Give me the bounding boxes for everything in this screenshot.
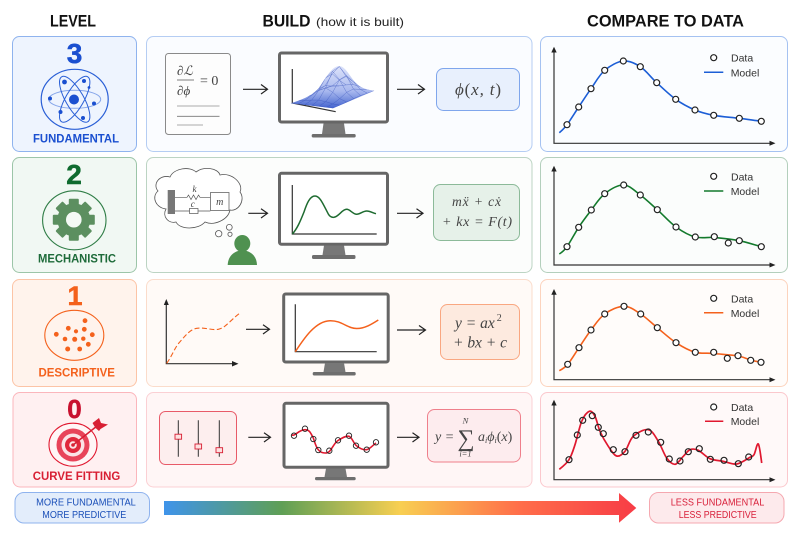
heading: build: (how it is built) (316, 15, 404, 29)
equation box: phi(x,t): ϕ(x, t) (455, 80, 501, 99)
equation box: mass spring damper (434, 184, 520, 240)
monitor with smooth curve (284, 294, 388, 376)
panel: data level 1 (540, 280, 788, 386)
legend: Model (731, 416, 759, 428)
callout: more fundamental, more predictive: MORE FUNDAMENTAL (36, 497, 136, 508)
arrow (397, 209, 423, 218)
number 1: 1 (67, 281, 83, 311)
equation box: basis sum: x) (501, 430, 512, 445)
arrow: gradient scale (164, 493, 636, 523)
icon: parameter sliders (160, 412, 236, 464)
legend: Model (731, 308, 759, 320)
icon: document with equation: = 0 (200, 74, 218, 89)
panel: level 1 descriptive (12, 280, 136, 386)
callout: more fundamental, more predictive (15, 492, 150, 523)
legend: Data (731, 171, 753, 183)
data points (564, 182, 764, 250)
heading: compare to data: COMPARE TO DATA (587, 12, 744, 30)
legend: Data (731, 402, 753, 414)
equation box: basis sum: ∑ (457, 426, 475, 452)
equation box: polynomial: + bx + c (453, 335, 507, 352)
data points (564, 58, 764, 128)
callout: less fundamental, less predictive: LESS FUNDAMENTAL (671, 497, 765, 508)
arrow (397, 433, 419, 442)
label: descriptive: DESCRIPTIVE (38, 368, 115, 380)
chart axes (551, 166, 776, 268)
legend (704, 52, 759, 80)
icon: scatter dots (45, 310, 104, 360)
callout: less fundamental, less predictive (650, 492, 784, 523)
panel: build level 2 (146, 158, 532, 272)
chart axes (551, 47, 776, 146)
equation box: basis sum: a (478, 430, 485, 445)
legend (704, 171, 759, 198)
model curve (559, 185, 761, 254)
equation box: mass spring damper: + kx = F(t) (442, 215, 512, 230)
legend: Data (731, 293, 753, 305)
arrow (397, 84, 424, 94)
legend: Data (731, 52, 753, 64)
equation box: polynomial: y = ax (455, 315, 495, 332)
arrow (246, 325, 270, 334)
legend (705, 402, 759, 428)
label: mechanistic: MECHANISTIC (38, 254, 116, 266)
callout: more fundamental, more predictive: MORE PREDICTIVE (42, 510, 127, 521)
chart axes (551, 400, 776, 482)
panel: build level 3 (146, 36, 532, 152)
heading: build (262, 12, 404, 30)
monitor with damped curve (280, 173, 388, 259)
panel: data level 3 (540, 36, 788, 152)
model curve (559, 306, 761, 371)
icon: atom (41, 69, 108, 129)
equation box: basis sum: i (494, 436, 497, 445)
panel: level 3 fundamental (12, 36, 136, 152)
equation box: basis sum: ( (497, 430, 502, 445)
thought cloud with spring-mass system: c (191, 199, 195, 209)
heading: level: LEVEL (50, 12, 96, 30)
legend: Model (731, 68, 759, 80)
icon: person (228, 235, 257, 265)
model curve (559, 61, 761, 133)
number 2: 2 (66, 159, 82, 190)
equation box: basis sum (428, 410, 520, 462)
arrow (248, 209, 268, 218)
legend: Model (731, 186, 759, 198)
equation box: mass spring damper: mẍ + cẋ (452, 194, 501, 209)
equation box: polynomial: 2 (497, 313, 502, 324)
equation box: basis sum: i=1 (459, 448, 472, 458)
data points (565, 303, 764, 367)
thought cloud with spring-mass system: k (192, 184, 198, 194)
model curve (559, 411, 762, 469)
panel: data level 0 (540, 392, 788, 487)
monitor with fitted points (284, 403, 388, 480)
equation box: phi(x,t) (436, 68, 520, 110)
legend (704, 293, 759, 320)
sketch chart with dashed curve (164, 299, 241, 366)
callout: less fundamental, less predictive: LESS PREDICTIVE (679, 510, 757, 521)
equation box: basis sum: i (485, 436, 487, 445)
panel: data level 2 (540, 158, 788, 272)
thought cloud with spring-mass system (155, 168, 242, 237)
icon: gear (43, 191, 106, 250)
monitor with surface plot (280, 53, 388, 138)
number 3: 3 (67, 38, 82, 69)
equation box: basis sum: N (462, 416, 470, 426)
arrow (397, 326, 426, 335)
panel: level 2 mechanistic (12, 158, 136, 272)
arrow (248, 433, 270, 442)
thought cloud with spring-mass system: m (216, 197, 223, 208)
icon: document with equation: ∂ℒ (177, 63, 193, 78)
chart axes (551, 289, 776, 382)
icon: document with equation: ∂ϕ (177, 83, 190, 98)
icon: document with equation (166, 54, 230, 134)
number 0: 0 (67, 394, 82, 424)
arrow (243, 84, 268, 94)
equation box: basis sum: ϕ (487, 430, 494, 445)
panel: build level 0 (146, 392, 532, 487)
icon: target with arrow (49, 418, 108, 466)
label: curve fitting: CURVE FITTING (33, 471, 120, 483)
label: fundamental: FUNDAMENTAL (33, 134, 119, 146)
equation box: basis sum: y = (433, 430, 454, 445)
panel: level 0 curve fitting (13, 392, 136, 487)
panel: build level 1 (146, 280, 532, 386)
data points (566, 413, 752, 467)
equation box: polynomial (440, 304, 520, 360)
heading: build: BUILD (262, 12, 310, 30)
